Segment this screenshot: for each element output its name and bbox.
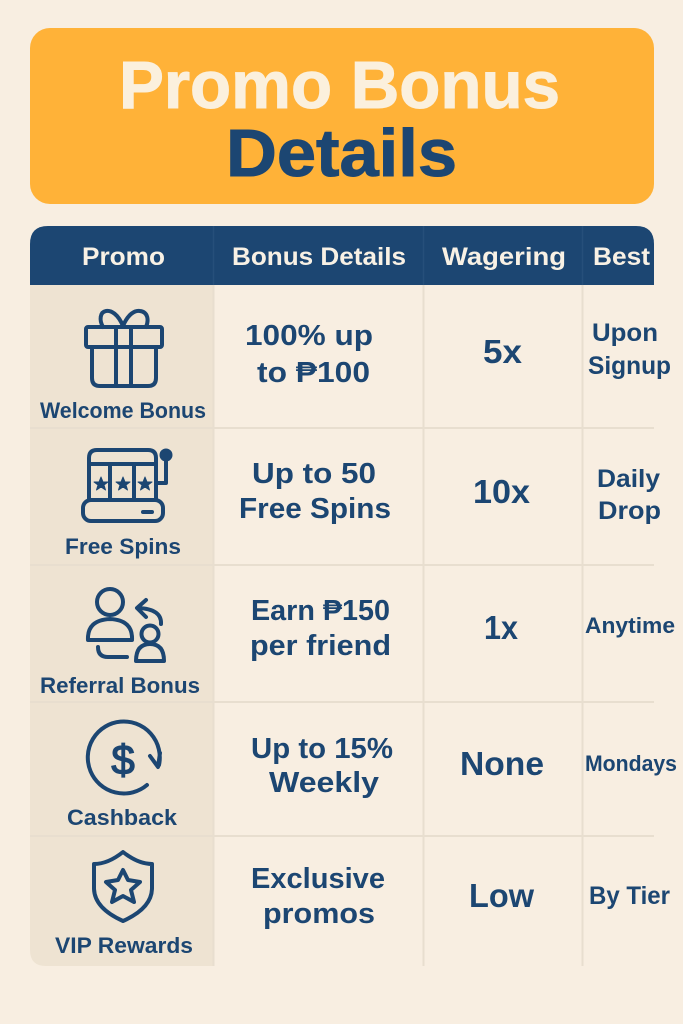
- row: free spins: [65, 450, 661, 559]
- label: referral bonus: Referral Bonus: [40, 673, 200, 698]
- bonus: up to 15% weekly: [251, 733, 393, 799]
- bonus: up to 50 free spins: Up to 50: [252, 458, 376, 490]
- bonus: earn ₱150 per friend: Earn ₱150: [251, 595, 390, 627]
- bonus: 100% up to ₱100: [245, 320, 373, 389]
- label: cashback: Cashback: [67, 805, 178, 830]
- wagering: 1x: 1x: [484, 609, 519, 646]
- label: welcome bonus: Welcome Bonus: [40, 398, 206, 423]
- icon: referral people: [88, 589, 164, 661]
- table grid: [30, 285, 654, 966]
- best: anytime: Anytime: [585, 613, 675, 638]
- wagering: 5x: 5x: [483, 333, 523, 370]
- icon: gift box: [86, 311, 162, 386]
- wagering: 10x: 10x: [473, 473, 531, 510]
- best: mondays: Mondays: [585, 751, 677, 776]
- bonus: earn ₱150 per friend: per friend: [250, 630, 391, 662]
- panel: table: [30, 226, 677, 966]
- bonus: exclusive promos: promos: [263, 898, 375, 930]
- best: daily drop: Daily: [597, 465, 660, 493]
- bonus: exclusive promos: [251, 863, 385, 930]
- bonus: up to 15% weekly: Weekly: [269, 767, 379, 799]
- wagering: none: None: [460, 745, 544, 782]
- title line 2: Details: [226, 116, 457, 191]
- row: referral bonus: [40, 589, 675, 698]
- header: wagering: Wagering: [442, 243, 566, 271]
- icon: cashback coin: [88, 721, 160, 793]
- bonus: 100% up to ₱100: 100% up: [245, 320, 373, 352]
- label: vip rewards: VIP Rewards: [55, 933, 193, 958]
- best: daily drop: Drop: [598, 497, 661, 525]
- bonus: up to 50 free spins: [239, 458, 391, 525]
- title banner: [30, 28, 654, 204]
- title line 1: Promo Bonus: [119, 48, 560, 123]
- wagering: low: Low: [469, 877, 534, 914]
- header: promo: Promo: [82, 243, 165, 271]
- row: welcome bonus: [40, 311, 671, 423]
- bonus: 100% up to ₱100: to ₱100: [257, 357, 370, 389]
- row: cashback: [67, 721, 677, 830]
- label: free spins: Free Spins: [65, 534, 181, 559]
- best: by tier: By Tier: [589, 882, 670, 910]
- bonus: up to 50 free spins: Free Spins: [239, 493, 391, 525]
- icon: shield with star: [94, 852, 152, 921]
- best: upon signup: Upon: [592, 319, 658, 347]
- icon: slot machine: [83, 450, 170, 521]
- header: bonus details: Bonus Details: [232, 243, 406, 271]
- best: upon signup: Signup: [588, 352, 671, 380]
- first column background: [30, 285, 213, 966]
- best: daily drop: [597, 465, 661, 525]
- icon: cashback coin: $: [111, 736, 135, 783]
- bonus: up to 15% weekly: Up to 15%: [251, 733, 393, 765]
- bonus: exclusive promos: Exclusive: [251, 863, 385, 895]
- row: vip rewards: [55, 852, 670, 958]
- header: best: Best: [593, 243, 651, 271]
- best: upon signup: [588, 319, 671, 380]
- bonus: earn ₱150 per friend: [250, 595, 391, 662]
- table header: [30, 226, 654, 285]
